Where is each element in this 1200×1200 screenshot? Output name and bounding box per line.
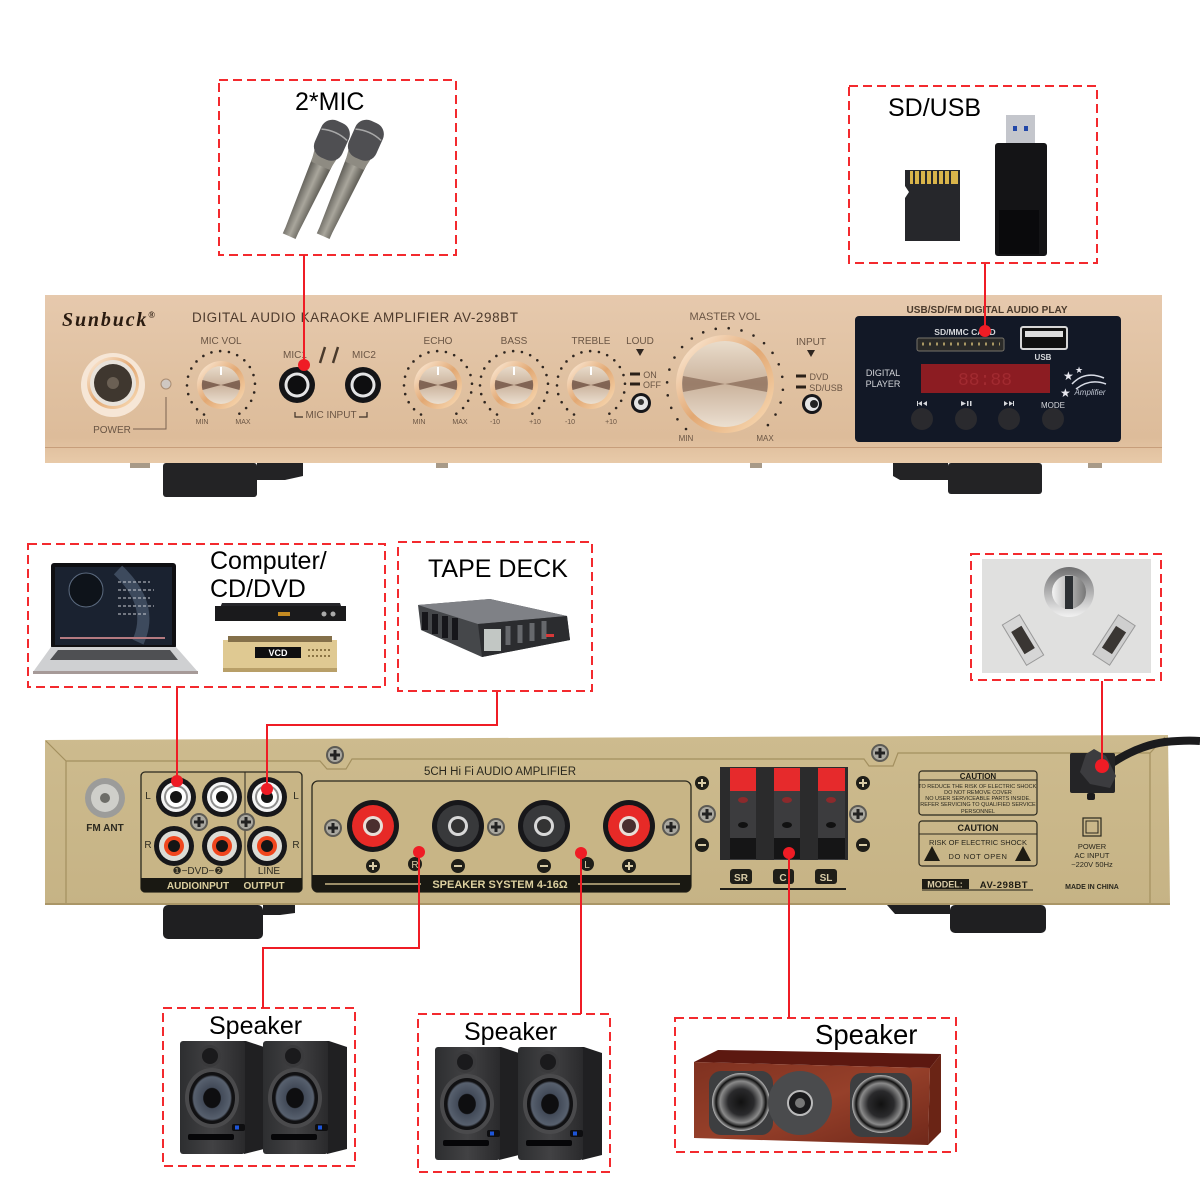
ECHO knob [404, 336, 472, 426]
speaker terminals L/R: L [584, 860, 590, 871]
caution label 2 [919, 821, 1037, 866]
icon: amplifier logo: ★ [1060, 386, 1071, 400]
feet [163, 905, 1046, 939]
MIC VOL knob: MAX [235, 419, 251, 426]
model title: DIGITAL AUDIO KARAOKE AMPLIFIER AV-298BT [192, 310, 518, 325]
audio input / output: L [293, 791, 299, 802]
BASS knob [480, 336, 548, 426]
icon: microphones [275, 116, 388, 242]
icon: laptop [33, 563, 198, 674]
caution label 1 [918, 771, 1038, 815]
panel: SD/USB [849, 86, 1097, 263]
INPUT switch: DVD [809, 372, 829, 382]
mic inputs: MIC INPUT [305, 410, 357, 421]
audio input / output: R [144, 840, 152, 851]
MIC VOL knob: MIC VOL [200, 336, 242, 347]
MASTER VOL knob [667, 311, 783, 443]
LOUD switch: OFF [643, 380, 661, 390]
ECHO knob: MIN [413, 419, 425, 426]
speaker terminals L/R: SPEAKER SYSTEM 4-16Ω [432, 879, 568, 891]
heading: 2*MIC: 2*MIC [295, 88, 364, 116]
TREBLE knob: TREBLE [572, 336, 611, 347]
rear panel body [45, 735, 1170, 905]
icon: speaker pair [180, 1041, 347, 1154]
player buttons [911, 401, 1065, 430]
power input label: MADE IN CHINA [1065, 884, 1119, 891]
icon: amplifier logo: ★ [1063, 369, 1074, 383]
model label [922, 879, 1033, 891]
wires [177, 255, 1102, 1018]
audio input / output: ❶−DVD−❷ [173, 866, 223, 877]
MASTER VOL knob: MAX [756, 434, 774, 443]
power button [81, 353, 171, 436]
USB/SD/FM heading: USB/SD/FM DIGITAL AUDIO PLAY [906, 305, 1068, 316]
power input label: POWER [1078, 842, 1107, 851]
digital player module: PLAYER [866, 379, 901, 389]
LOUD switch: ON [643, 370, 657, 380]
feet [130, 463, 1102, 497]
panel: left speakers [163, 1008, 355, 1166]
brand: Sunbuck [62, 309, 146, 331]
caution label 2: DO NOT OPEN [949, 852, 1007, 861]
model label: AV-298BT [980, 880, 1028, 891]
caution label 1: TO REDUCE THE RISK OF ELECTRIC SHOCK, [918, 784, 1038, 790]
panel: power outlet [971, 554, 1161, 680]
rear amplifier [45, 735, 1200, 939]
icon: tape deck [418, 599, 570, 657]
connection dots [171, 325, 1109, 859]
power input label [1065, 818, 1119, 891]
caution label 2: RISK OF ELECTRIC SHOCK [929, 838, 1027, 847]
surround terminals: C [779, 873, 787, 884]
icon: amplifier logo [1060, 365, 1106, 400]
audio input / output [141, 772, 302, 892]
heading: Speaker: Speaker [464, 1018, 557, 1046]
heading: TAPE DECK: TAPE DECK [428, 555, 568, 583]
LOUD switch [626, 336, 661, 413]
TREBLE knob: +10 [605, 419, 617, 426]
mic inputs: MIC2 [352, 350, 376, 361]
INPUT switch: SD/USB [809, 383, 843, 393]
digital player module: USB [1035, 353, 1052, 362]
ECHO knob: MAX [452, 419, 468, 426]
MASTER VOL knob: MASTER VOL [690, 311, 760, 323]
speaker terminals L/R [312, 781, 691, 892]
heading: Speaker: Speaker [815, 1019, 917, 1050]
power input label: AC INPUT [1074, 851, 1110, 860]
caution label 1: PERSONNEL [961, 809, 995, 815]
FM antenna [85, 778, 125, 834]
TREBLE knob [557, 336, 625, 426]
MASTER VOL knob: MIN [679, 434, 694, 443]
speaker terminals L/R: R [411, 860, 419, 871]
panel: Computer / CD / DVD: CD/DVD [210, 575, 306, 603]
audio input / output: OUTPUT [243, 881, 285, 892]
panel: Computer / CD / DVD [28, 544, 385, 687]
BASS knob: -10 [490, 419, 500, 426]
LOUD switch: LOUD [626, 336, 654, 347]
caution label 1: DO NOT REMOVE COVER [944, 790, 1012, 796]
brand: ® [148, 310, 155, 320]
caution label 1: CAUTION [960, 772, 996, 781]
icon: USB stick [995, 115, 1047, 256]
icon: VCD player [223, 636, 337, 672]
mic inputs [279, 347, 381, 421]
heading: Computer/CD/DVD: Computer/ [210, 547, 327, 575]
heading: Speaker: Speaker [209, 1012, 302, 1040]
surround terminals: SL [820, 873, 832, 884]
icon: center speaker [694, 1050, 941, 1145]
caution label 1: NO USER SERVICEABLE PARTS INSIDE. [925, 796, 1031, 802]
5CH heading: 5CH Hi Fi AUDIO AMPLIFIER [424, 766, 576, 778]
front panel body [45, 295, 1162, 463]
digital player module [855, 316, 1121, 442]
mic inputs: MIC1 [283, 350, 307, 361]
panel: center speaker [675, 1018, 956, 1152]
icon: amplifier logo: ★ [1075, 365, 1083, 375]
ECHO knob: ECHO [424, 336, 453, 347]
BASS knob: +10 [529, 419, 541, 426]
TREBLE knob: -10 [565, 419, 575, 426]
audio input / output: R [292, 840, 300, 851]
icon: DVD player [215, 603, 346, 621]
MIC VOL knob: MIN [196, 419, 208, 426]
FM antenna: FM ANT [86, 823, 124, 834]
icon: outlet [982, 559, 1151, 673]
LED display: 88:88 [958, 371, 1012, 391]
icon: amplifier logo: Amplifier [1073, 388, 1106, 397]
surround terminals [695, 767, 870, 889]
icon: VCD player: VCD [268, 648, 288, 658]
surround terminals: SR [734, 873, 749, 884]
icon: speaker pair [435, 1047, 602, 1160]
icon: SD card [905, 170, 960, 241]
audio input / output: LINE [258, 866, 280, 877]
power plug and cord [1070, 741, 1200, 800]
caution label 1: REFER SERVICING TO QUALIFIED SERVICE [920, 802, 1036, 808]
model label: MODEL: [927, 880, 963, 890]
INPUT switch: INPUT [796, 337, 826, 348]
panel: right speakers [418, 1014, 610, 1172]
LED display [921, 364, 1050, 393]
player buttons: MODE [1041, 401, 1065, 410]
panel: TAPE DECK [398, 542, 592, 691]
power input label: ~220V 50Hz [1071, 860, 1113, 869]
front amplifier [45, 295, 1162, 497]
heading: SD/USB: SD/USB [888, 94, 981, 122]
audio input / output: AUDIOINPUT [167, 881, 229, 892]
BASS knob: BASS [501, 336, 528, 347]
power button: POWER [93, 425, 131, 436]
digital player module: DIGITAL [866, 368, 900, 378]
audio input / output: L [145, 791, 151, 802]
INPUT switch [796, 337, 843, 414]
panel: 2*MIC [219, 80, 456, 255]
digital player module: SD/MMC CARD [934, 327, 996, 337]
MIC VOL knob [187, 336, 255, 426]
caution label 2: CAUTION [958, 823, 998, 833]
